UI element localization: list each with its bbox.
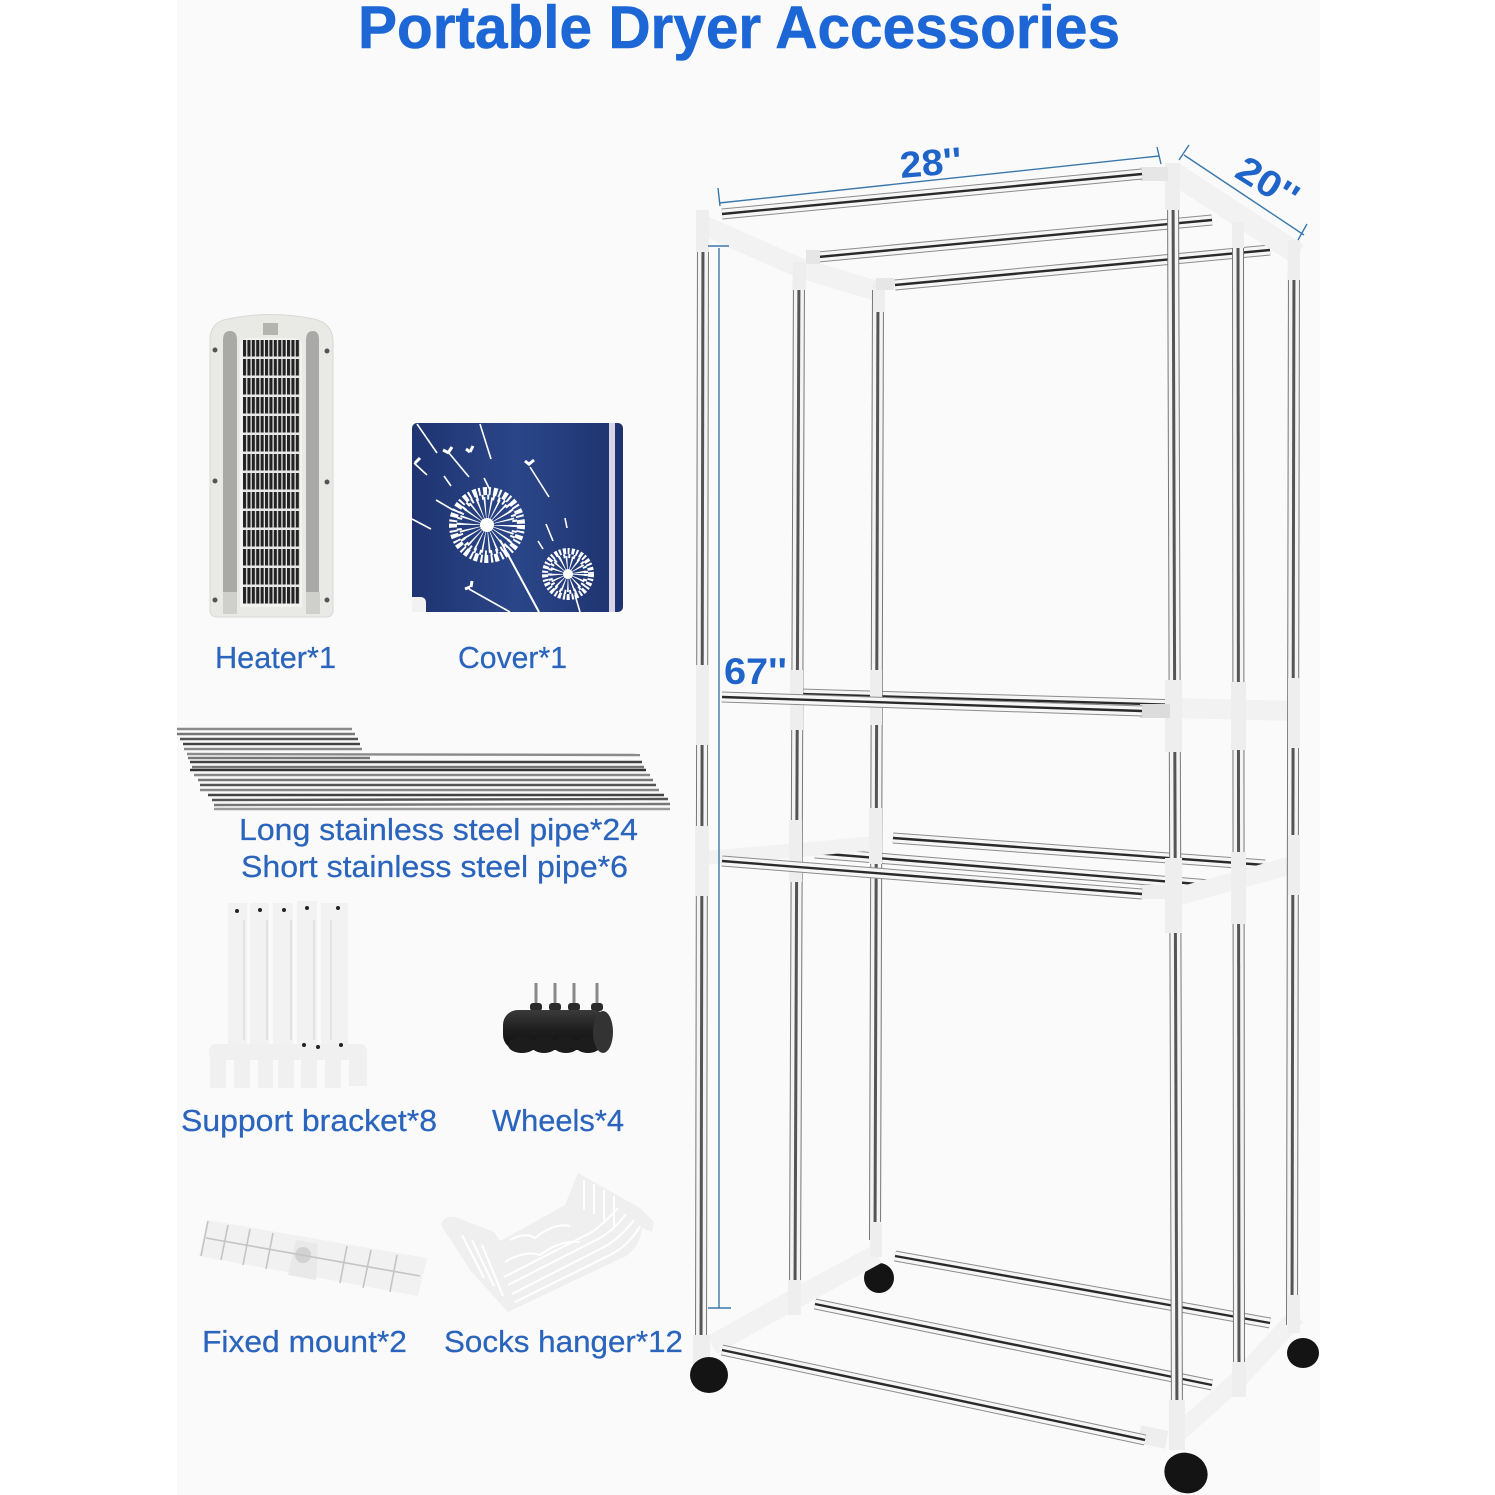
pipe labels [239, 812, 638, 884]
connector bands [705, 172, 1298, 1435]
pipe labels: Short stainless steel pipe*6 [241, 849, 628, 884]
icon: cover with dandelions [412, 423, 623, 612]
fixed mount label: Fixed mount*2 [202, 1324, 407, 1359]
socks hanger label: Socks hanger*12 [444, 1324, 683, 1359]
icon: wheels [503, 983, 613, 1053]
connector sockets [693, 163, 1300, 1450]
uprights [701, 180, 1294, 1430]
pipe labels: Long stainless steel pipe*24 [239, 812, 638, 847]
dimension: height 67 inches: 67'' [724, 651, 787, 692]
dimension: width 28 inches [718, 140, 1161, 206]
dimension: width 28 inches: 28'' [898, 140, 963, 186]
icon: heater [210, 314, 333, 617]
icon: stainless steel pipes [177, 729, 670, 809]
wheels label: Wheels*4 [492, 1103, 624, 1138]
background panel [177, 0, 1320, 1495]
support bracket label: Support bracket*8 [181, 1103, 437, 1138]
dimension: height 67 inches [708, 246, 787, 1308]
back wheels [864, 1263, 1319, 1368]
front rails [722, 174, 1145, 1440]
dimension: depth 20 inches [1179, 145, 1307, 240]
heater label: Heater*1 [215, 640, 336, 675]
dimension: depth 20 inches: 20'' [1229, 148, 1306, 218]
icon: support brackets [209, 901, 367, 1088]
icon: fixed mount [199, 1220, 427, 1296]
dryer rack frame [690, 163, 1319, 1495]
rear rails [800, 220, 1285, 1385]
front wheels [690, 1357, 1214, 1495]
icon: socks hanger [441, 1173, 654, 1312]
cover label: Cover*1 [458, 640, 567, 675]
